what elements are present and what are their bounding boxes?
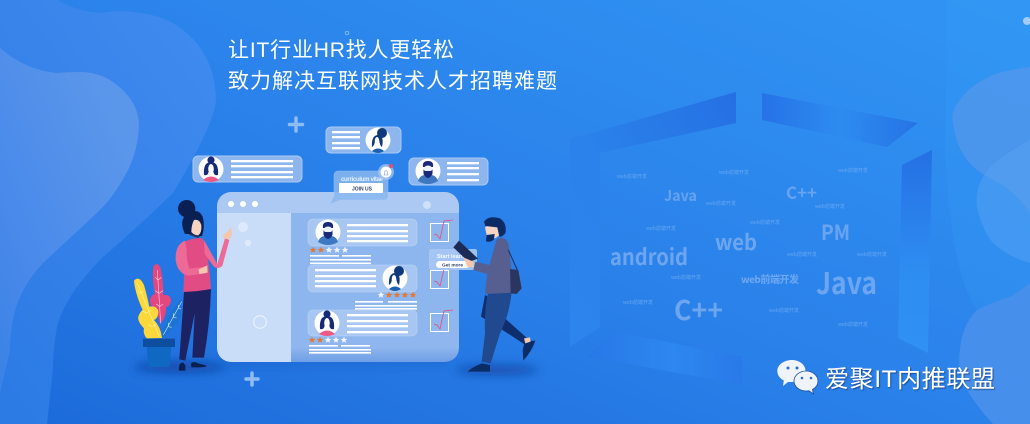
keyword cloud: web前端开发 bbox=[741, 271, 799, 286]
keyword cloud: web前端开发 bbox=[706, 200, 736, 207]
brand name: 爱聚IT内推联盟 bbox=[825, 366, 995, 393]
man figure bbox=[453, 217, 535, 372]
right background frames bbox=[570, 92, 932, 385]
keyword cloud: web前端开发 bbox=[646, 225, 676, 232]
resume callout bbox=[330, 164, 394, 204]
left decorative blobs bbox=[0, 0, 216, 424]
keyword cloud: web前端开发 bbox=[719, 169, 749, 176]
resume callout: curriculum vitae bbox=[341, 177, 384, 183]
start learning card: Get more bbox=[442, 262, 463, 268]
right decorative blobs bbox=[945, 0, 1030, 424]
decorative plus signs and ring bbox=[246, 31, 349, 385]
keyword cloud: web前端开发 bbox=[838, 321, 868, 328]
keyword cloud: web前端开发 bbox=[769, 307, 799, 314]
title: 让IT行业HR找人更轻松 bbox=[228, 39, 454, 62]
browser window panel bbox=[217, 192, 459, 362]
candidate row 1 bbox=[308, 219, 417, 264]
check boxes bbox=[430, 220, 453, 332]
woman figure bbox=[176, 200, 232, 371]
top left profile card bbox=[193, 156, 302, 182]
candidate row 2 bbox=[308, 265, 417, 310]
keyword cloud: web前端开发 bbox=[617, 173, 647, 180]
title: 致力解决互联网技术人才招聘难题 bbox=[228, 70, 557, 93]
floor shadows bbox=[134, 360, 539, 375]
keyword cloud: C++ bbox=[674, 289, 723, 328]
keyword cloud: android bbox=[610, 240, 688, 272]
title bbox=[228, 39, 557, 93]
candidate row 3 bbox=[308, 310, 417, 354]
start learning card bbox=[429, 249, 477, 270]
keyword cloud: web前端开发 bbox=[787, 251, 817, 258]
top centre profile card bbox=[326, 127, 401, 153]
keyword cloud bbox=[610, 167, 887, 328]
start learning card: Start learn bbox=[437, 254, 465, 260]
keyword cloud: Java bbox=[816, 259, 877, 303]
keyword cloud: web前端开发 bbox=[838, 167, 868, 174]
keyword cloud: web bbox=[715, 227, 757, 257]
keyword cloud: PM bbox=[821, 217, 850, 247]
resume callout: JOIN US bbox=[352, 186, 373, 192]
keyword cloud: Java bbox=[664, 185, 697, 206]
top right profile card bbox=[409, 158, 488, 185]
keyword cloud: web前端开发 bbox=[623, 299, 653, 306]
wechat logo bbox=[777, 360, 818, 394]
keyword cloud: web前端开发 bbox=[750, 219, 780, 226]
keyword cloud: web前端开发 bbox=[857, 251, 887, 258]
keyword cloud: C++ bbox=[786, 179, 817, 204]
plant bbox=[134, 264, 182, 367]
keyword cloud: web前端开发 bbox=[671, 274, 701, 281]
keyword cloud: web前端开发 bbox=[815, 203, 845, 210]
